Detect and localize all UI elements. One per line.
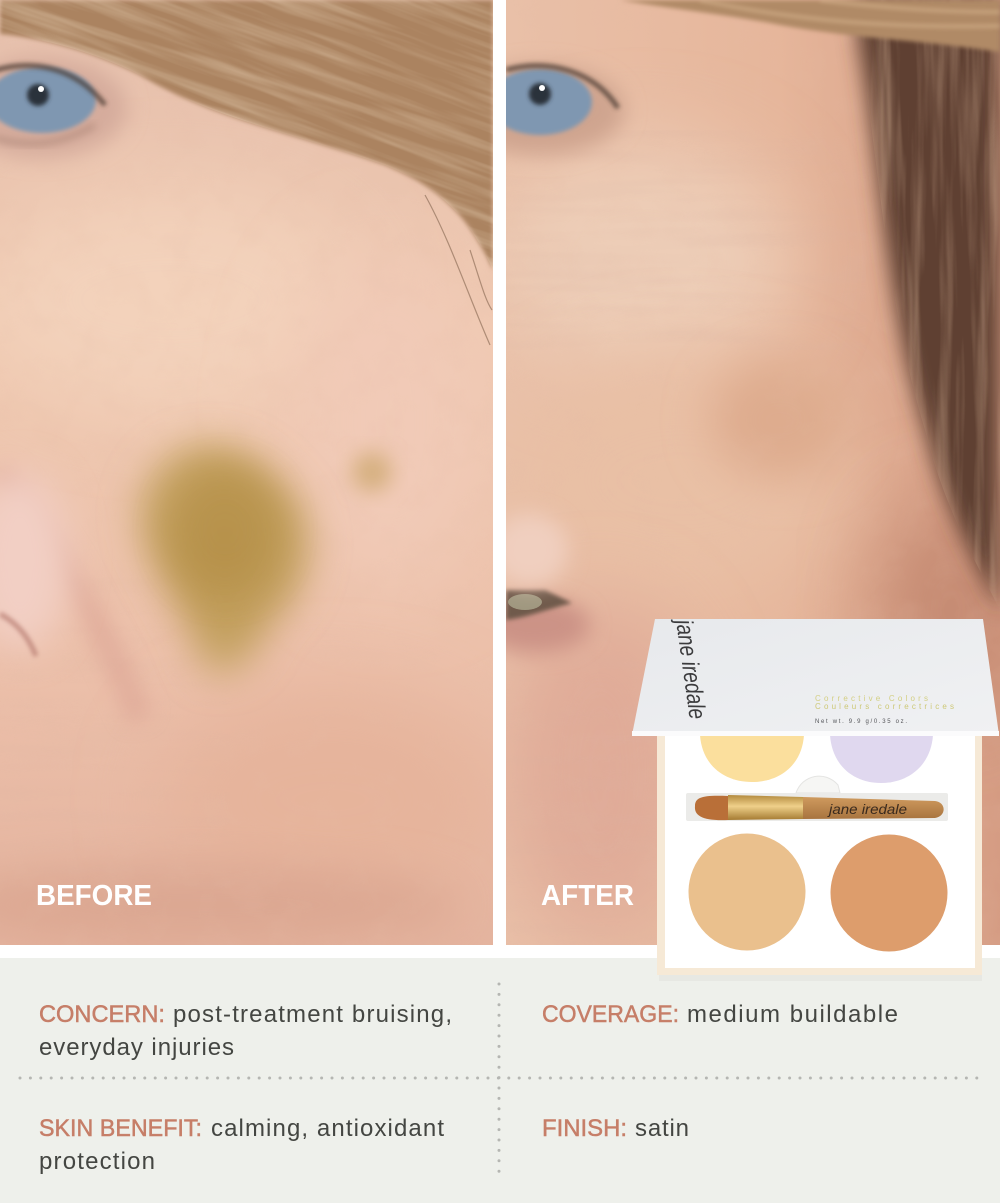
label: before: BEFORE: [36, 880, 152, 912]
lid brand logo: jane iredale: [670, 616, 711, 721]
eye: [0, 58, 127, 158]
pan: terracotta: [830, 834, 948, 952]
text: concern: everyday injuries: [39, 1034, 234, 1061]
top hair: [620, 0, 1000, 52]
skin texture: [0, 0, 493, 945]
dark side hair: [850, 0, 1000, 620]
nose fold crease: [0, 470, 140, 720]
pan: yellow: [700, 735, 804, 782]
face highlights: [0, 207, 454, 938]
makeup brush: [695, 795, 944, 820]
horizontal dotted divider: [20, 1076, 978, 1080]
text: concern: post-treatment bruising,: [173, 1001, 452, 1028]
palette base: [657, 735, 982, 981]
palette lid: [632, 616, 999, 736]
text: skin benefit: calming, antioxidant: [211, 1115, 444, 1142]
skin texture: [506, 0, 1000, 945]
hair: [0, 0, 493, 270]
label: after: AFTER: [541, 880, 634, 912]
brush slot: [686, 776, 948, 821]
pan: tan: [688, 834, 806, 950]
text: coverage: medium buildable: [687, 1001, 898, 1028]
text: concern: CONCERN:: [39, 1001, 165, 1028]
lid net weight: Net wt. 9.9 g/0.35 oz.: [815, 719, 907, 725]
panel: product details: [0, 958, 1000, 1203]
text: skin benefit: SKIN BENEFIT:: [39, 1115, 202, 1142]
pan: lilac: [830, 735, 933, 783]
fine hair wisps: [425, 195, 492, 345]
bruise: [137, 443, 392, 676]
text: finish: FINISH:: [542, 1115, 627, 1142]
vertical dotted divider: [498, 984, 500, 1172]
panel: before photo: [0, 0, 493, 945]
eye crease: [506, 510, 594, 660]
lid product name: Corrective Colors: [815, 694, 928, 703]
text: coverage: COVERAGE:: [542, 1001, 679, 1028]
palette lid: Couleurs correctrices: [815, 702, 954, 711]
text: finish: satin: [635, 1115, 689, 1142]
face tones: [490, 140, 1000, 940]
makeup brush: jane iredale: [827, 801, 907, 817]
eye: [506, 58, 628, 161]
text: skin benefit: protection: [39, 1148, 155, 1175]
panel: after photo: [455, 0, 1000, 945]
product: corrective colors palette: [632, 616, 999, 981]
